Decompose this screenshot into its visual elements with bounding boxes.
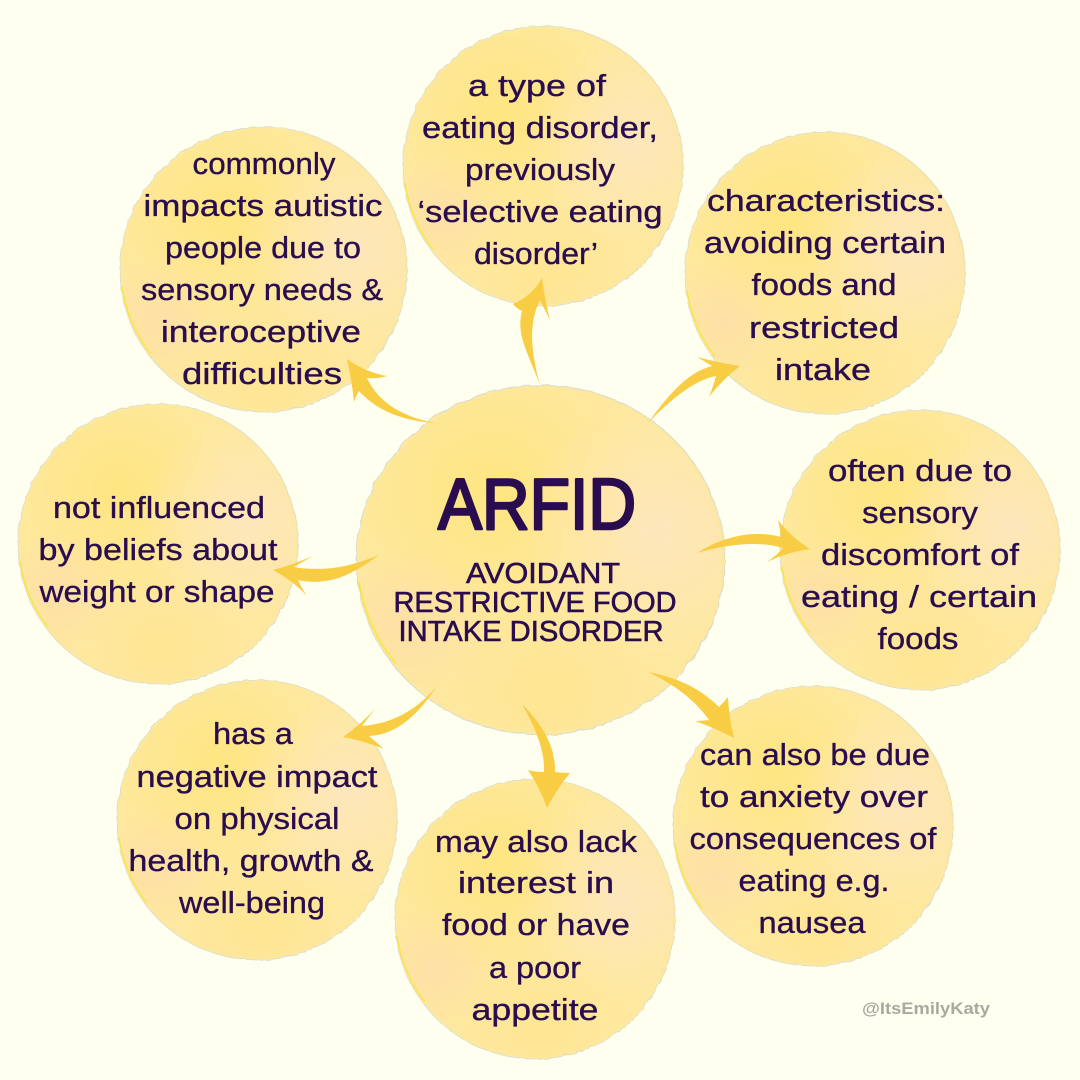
arrow: to bottom-right circle bbox=[648, 672, 734, 738]
text: anxiety over consequences: to anxiety over bbox=[700, 779, 928, 814]
text: beliefs about weight: weight or shape bbox=[38, 574, 274, 609]
text: lack of interest: a poor bbox=[489, 950, 581, 985]
text: characteristics: intake bbox=[775, 352, 871, 387]
panel: top circle bbox=[403, 26, 683, 306]
arrow: to bottom-left circle bbox=[343, 686, 437, 749]
text: autistic people: commonly bbox=[192, 146, 336, 181]
text: sensory discomfort: foods bbox=[878, 621, 958, 656]
panel: top-left circle bbox=[120, 127, 407, 412]
text: sensory discomfort: sensory bbox=[862, 495, 979, 530]
arrow: to top-right circle bbox=[648, 357, 740, 423]
text: negative impact: well-being bbox=[178, 885, 325, 920]
panel: right circle bbox=[780, 410, 1060, 690]
subtitle: full name: INTAKE DISORDER bbox=[398, 616, 664, 648]
text: beliefs about weight bbox=[38, 490, 278, 609]
panel: top-right circle bbox=[685, 132, 965, 414]
text: sensory discomfort bbox=[801, 453, 1037, 656]
text: lack of interest: interest in bbox=[458, 865, 614, 900]
text: negative impact: has a bbox=[213, 716, 294, 751]
credit handle: @ItsEmilyKaty bbox=[862, 999, 991, 1018]
text: type of eating disorder: eating disorder, bbox=[422, 110, 658, 145]
subtitle: full name: AVOIDANT bbox=[466, 558, 620, 590]
text: sensory discomfort: often due to bbox=[828, 453, 1012, 488]
text: autistic people: impacts autistic bbox=[144, 188, 382, 223]
title: ARFID: ARFID bbox=[438, 465, 636, 545]
panel: central circle bbox=[356, 385, 725, 735]
arrow: to left circle bbox=[273, 555, 379, 596]
text: negative impact bbox=[128, 716, 378, 920]
panel: left circle bbox=[18, 404, 298, 684]
text: characteristics: restricted bbox=[749, 310, 899, 345]
text: characteristics bbox=[704, 183, 946, 387]
text: characteristics: characteristics: bbox=[707, 183, 945, 218]
text: type of eating disorder: disorder’ bbox=[474, 236, 598, 271]
panel: bottom-right circle bbox=[673, 686, 953, 966]
text: lack of interest bbox=[435, 824, 638, 1027]
subtitle: full name bbox=[394, 558, 676, 648]
text: lack of interest: may also lack bbox=[435, 824, 638, 859]
text: autistic people bbox=[141, 146, 383, 391]
text: sensory discomfort: eating / certain bbox=[801, 579, 1037, 614]
text: autistic people: interoceptive bbox=[161, 314, 361, 349]
text: autistic people: sensory needs & bbox=[141, 272, 383, 307]
text: lack of interest: food or have bbox=[442, 907, 630, 942]
text: beliefs about weight: by beliefs about bbox=[38, 532, 278, 567]
text: sensory discomfort: discomfort of bbox=[821, 537, 1019, 572]
subtitle: full name: RESTRICTIVE FOOD bbox=[394, 587, 676, 619]
text: anxiety over consequences: consequences of bbox=[690, 821, 937, 856]
text: type of eating disorder: a type of bbox=[468, 68, 606, 103]
panel: bottom circle bbox=[395, 779, 675, 1059]
text: beliefs about weight: not influenced bbox=[53, 490, 265, 525]
text: autistic people: difficulties bbox=[182, 356, 342, 391]
arrow: to top circle bbox=[513, 278, 550, 385]
text: characteristics: foods and bbox=[752, 267, 896, 302]
arrow: to top-left circle bbox=[347, 359, 435, 423]
text: anxiety over consequences: nausea bbox=[758, 905, 866, 940]
text: anxiety over consequences: eating e.g. bbox=[738, 863, 890, 898]
text: anxiety over consequences: can also be due bbox=[700, 737, 930, 772]
text: type of eating disorder: ‘selective eating bbox=[418, 194, 662, 229]
text: negative impact: health, growth & bbox=[128, 843, 374, 878]
text: negative impact: negative impact bbox=[136, 759, 378, 794]
text: type of eating disorder: previously bbox=[465, 152, 616, 187]
text: autistic people: people due to bbox=[165, 230, 361, 265]
arrow: to right circle bbox=[697, 520, 810, 562]
text: characteristics: avoiding certain bbox=[704, 225, 946, 260]
text: type of eating disorder bbox=[418, 68, 662, 271]
text: lack of interest: appetite bbox=[472, 992, 598, 1027]
text: negative impact: on physical bbox=[174, 801, 340, 836]
panel: bottom-left circle bbox=[117, 680, 397, 960]
text: anxiety over consequences bbox=[690, 737, 937, 940]
arrow: to bottom circle bbox=[522, 704, 570, 808]
